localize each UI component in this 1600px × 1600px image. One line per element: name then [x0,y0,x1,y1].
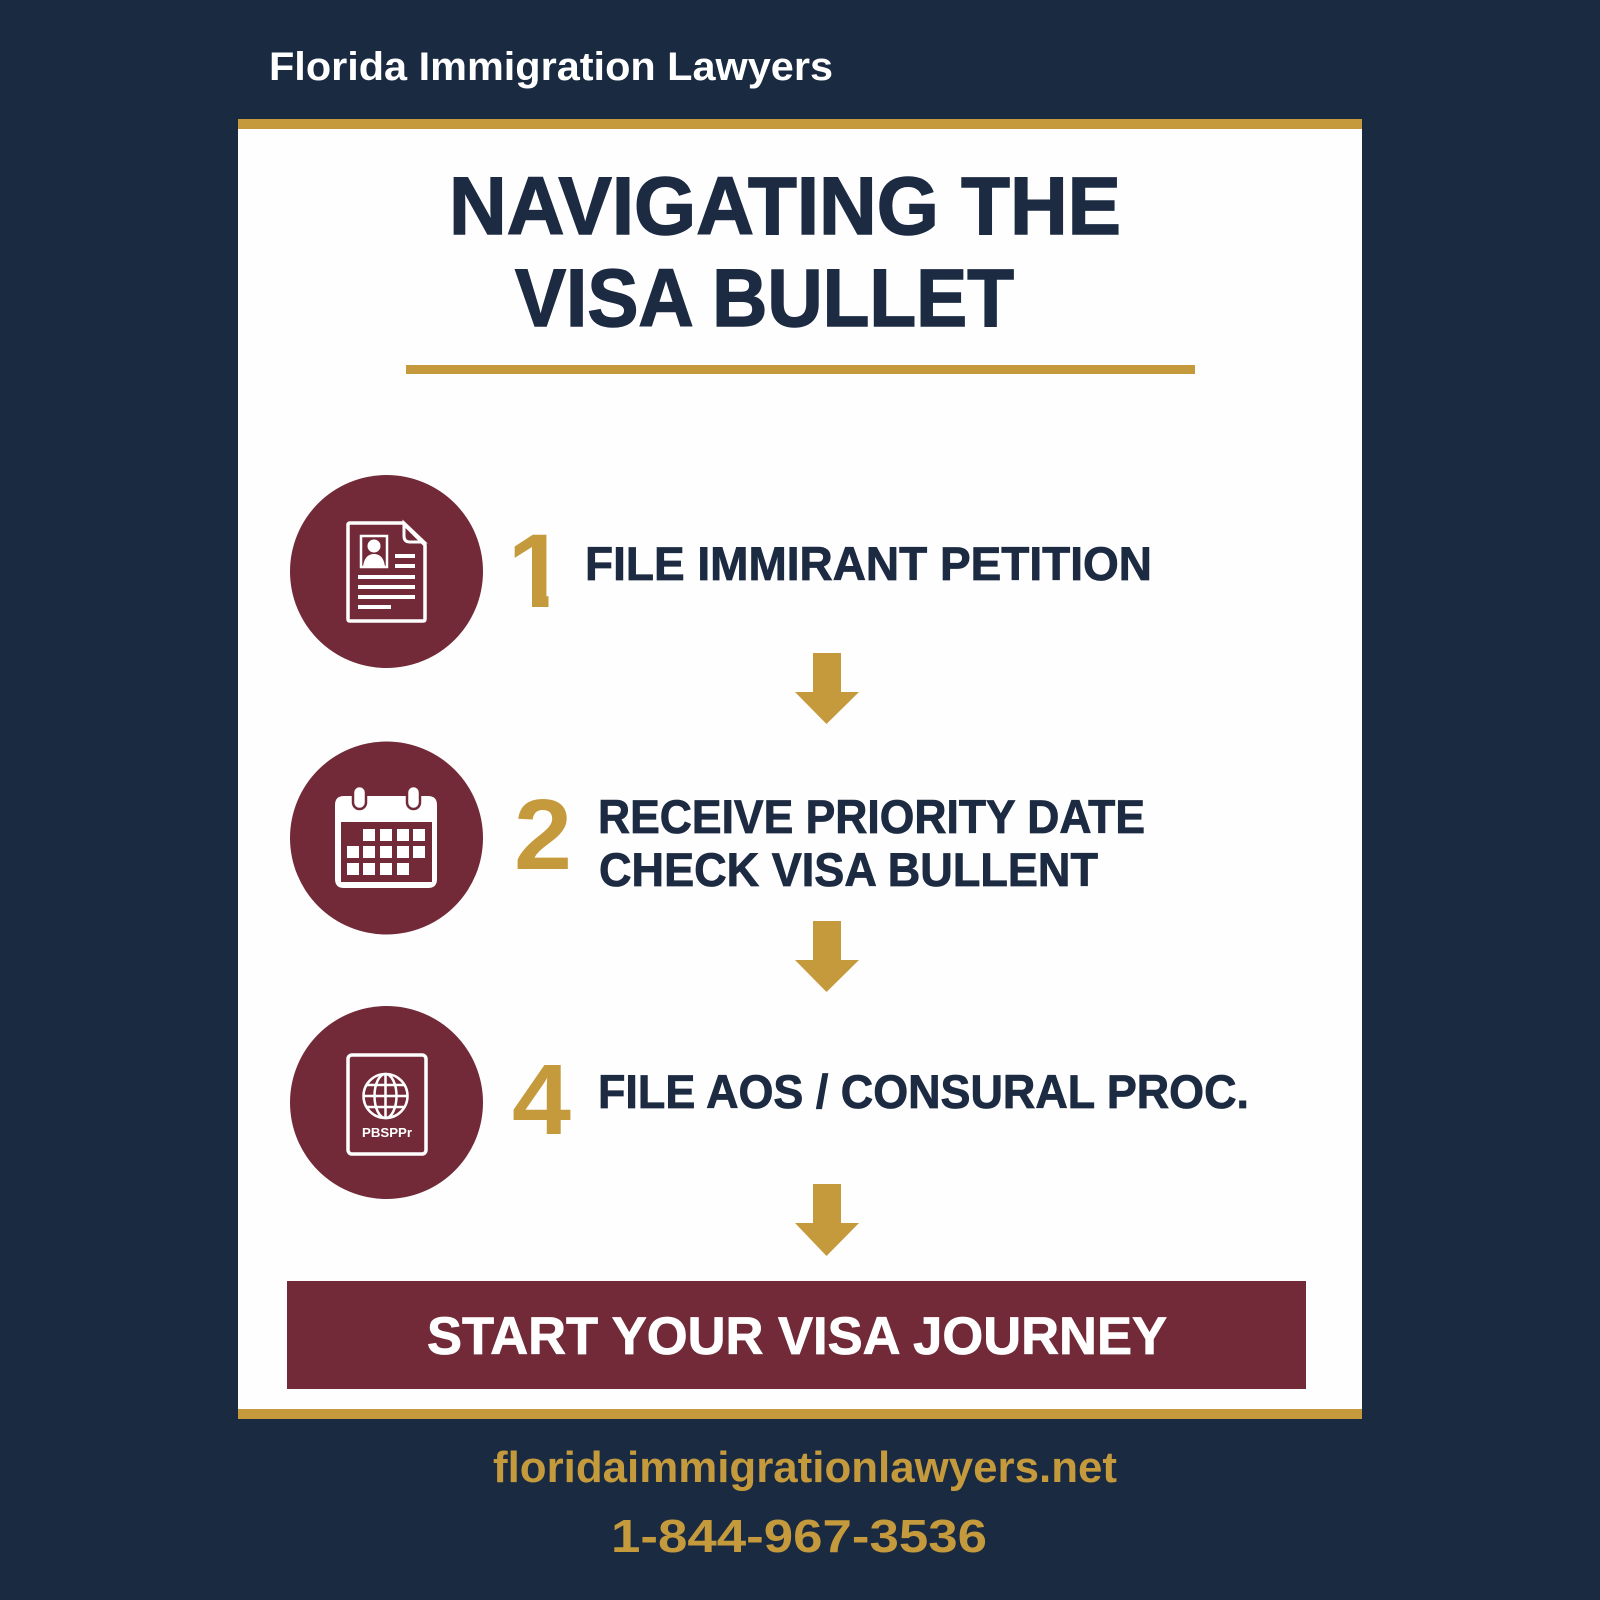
call to action banner: START YOUR VISA JOURNEY [427,1307,1167,1366]
call to action banner [287,1281,1306,1389]
step 3 label: FILE AOS / CONSURAL PROC. [598,1065,1249,1118]
icon: passport in circle [290,1006,483,1199]
arrow 3 [795,1184,859,1256]
step 2 [290,742,1145,934]
step 2 label [598,790,1145,896]
number 4: 4 [512,1044,571,1156]
infographic canvas [238,51,1362,1552]
icon: document in circle [290,475,483,668]
footer: phone: 1-844-967-3536 [611,1510,987,1562]
footer: website: floridaimmigrationlawyers.net [493,1443,1117,1492]
title [449,161,1121,344]
title: VISA BULLET [515,253,1014,344]
panel: main white card [238,119,1362,1419]
title divider [406,365,1195,374]
arrow 1 [795,653,859,724]
step 1 label: FILE IMMIRANT PETITION [585,537,1152,590]
step 2 label: RECEIVE PRIORITY DATE [598,790,1145,843]
arrow 2 [795,921,859,992]
number 2: 2 [514,779,572,891]
step 2 label: CHECK VISA BULLENT [599,843,1098,896]
icon: calendar in circle [290,742,483,934]
icon: passport in circle: PBSPPr [362,1125,412,1140]
step 1 [290,475,1152,668]
step 3 [290,1006,1249,1199]
number 1: 1 [508,513,566,630]
header: firm name: Florida Immigration Lawyers [269,45,833,89]
title: NAVIGATING THE [449,161,1121,252]
